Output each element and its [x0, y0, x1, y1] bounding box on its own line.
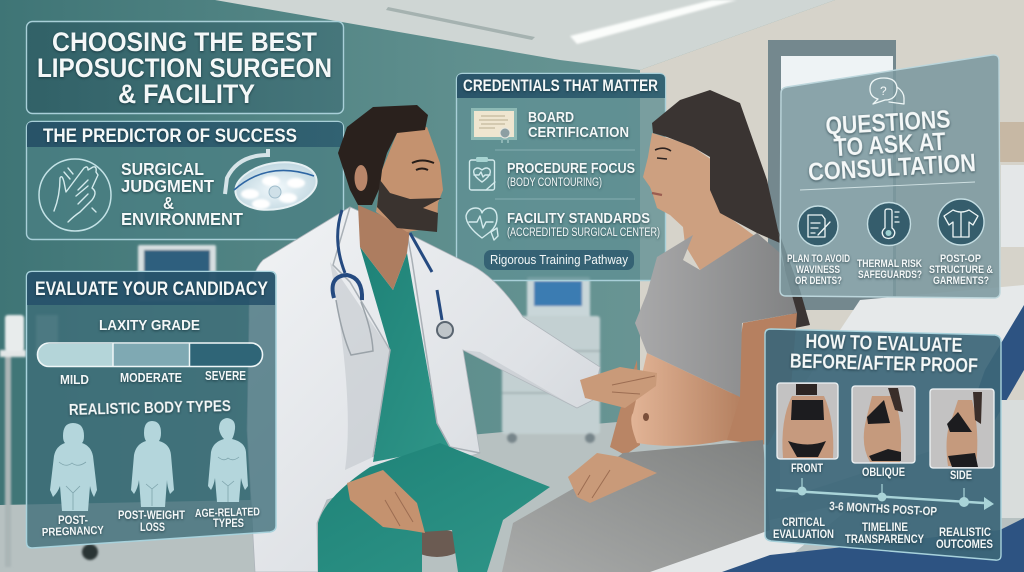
proof criteria labels: TRANSPARENCY — [845, 534, 924, 546]
question labels — [787, 253, 993, 287]
proof heading: HOW TO EVALUATE — [805, 331, 963, 357]
proof criteria labels: REALISTIC — [939, 527, 991, 539]
question labels: GARMENTS? — [933, 275, 989, 287]
board certification text: CERTIFICATION — [528, 124, 629, 141]
laxity grade scale bar — [37, 343, 262, 366]
patient: arm — [725, 313, 797, 445]
question labels: PLAN TO AVOID — [787, 253, 850, 265]
surgical judgment and environment text: SURGICAL — [121, 159, 204, 179]
doctor: stool — [318, 529, 464, 572]
doctor: eye and brow — [412, 160, 434, 170]
icon: heart with heartbeat — [466, 208, 498, 240]
questions heading — [805, 104, 977, 187]
photo: doctor — [247, 105, 600, 572]
timeline with arrow — [776, 478, 994, 510]
patient: trousers — [502, 440, 770, 572]
doctor: lapel lines — [333, 207, 480, 457]
body type labels: LOSS — [140, 522, 165, 534]
photo: side view — [930, 389, 994, 468]
title: LIPOSUCTION SURGEON — [37, 53, 332, 83]
doctor: trousers — [318, 443, 550, 572]
proof criteria labels: OUTCOMES — [936, 539, 993, 551]
doctor: stethoscope — [333, 210, 453, 355]
questions heading: QUESTIONS — [825, 105, 951, 141]
realistic body types heading: REALISTIC BODY TYPES — [69, 398, 231, 419]
icon: thermometer — [868, 202, 910, 246]
icon: surgical lamp — [225, 149, 320, 216]
body type labels: TYPES — [213, 518, 244, 530]
candidacy header band — [27, 272, 275, 305]
background: floor — [0, 420, 1024, 572]
body type labels — [42, 506, 260, 539]
photo: oblique view — [852, 386, 915, 463]
background: right wall — [640, 0, 1024, 420]
doctor: scrub top — [360, 247, 450, 462]
photo: patient — [502, 90, 810, 572]
procedure focus text: PROCEDURE FOCUS — [507, 160, 635, 177]
icon: question speech bubbles — [870, 78, 904, 104]
laxity scale labels: SEVERE — [205, 368, 246, 383]
body type labels: AGE-RELATED — [195, 506, 260, 520]
question labels: OR DENTS? — [795, 275, 842, 287]
question labels: SAFEGUARDS? — [858, 269, 922, 281]
panel: the predictor of success — [26, 122, 344, 240]
doctor: hair — [338, 105, 428, 205]
patient: navel — [643, 413, 649, 421]
doctor: face — [376, 127, 443, 232]
proof criteria labels: EVALUATION — [773, 529, 834, 541]
proof heading — [790, 331, 979, 377]
view labels: SIDE — [950, 468, 972, 482]
background: wall monitor — [138, 245, 216, 301]
questions heading: TO ASK AT — [833, 128, 946, 162]
doctor: hand on knee — [347, 470, 425, 533]
laxity scale labels: MILD — [60, 372, 89, 387]
background: window — [768, 40, 896, 310]
question labels: WAVINESS — [796, 264, 840, 276]
background: wall poster — [1001, 165, 1024, 247]
photo: front view — [777, 383, 838, 459]
rigorous training pathway pill — [484, 250, 634, 270]
patient: shirt — [635, 233, 797, 397]
timeline label: 3-6 MONTHS POST-OP — [829, 499, 937, 519]
icon: clipboard with heart — [470, 157, 495, 190]
background: ceiling light — [570, 0, 737, 44]
view labels — [791, 461, 972, 482]
laxity grade heading: LAXITY GRADE — [99, 317, 200, 334]
facility standards text — [507, 210, 660, 239]
body type labels: POST- — [58, 515, 88, 527]
icon: question speech bubbles: ? — [880, 84, 887, 98]
proof criteria labels: TIMELINE — [862, 522, 908, 534]
body type labels: PREGNANCY — [42, 525, 104, 539]
title — [37, 27, 332, 109]
board certification text — [528, 109, 629, 141]
rigorous training pathway pill: Rigorous Training Pathway — [490, 252, 628, 267]
background: wall stripe — [998, 122, 1024, 162]
background: exam table — [620, 285, 1024, 572]
doctor: beard — [377, 180, 442, 232]
doctor: sleeve shadow — [330, 262, 577, 470]
laxity scale labels: MODERATE — [120, 370, 182, 385]
credentials heading: CREDENTIALS THAT MATTER — [463, 76, 658, 95]
background: medical cart — [502, 277, 600, 443]
title: & FACILITY — [118, 79, 255, 109]
patient: hair — [652, 90, 780, 243]
procedure focus text: (BODY CONTOURING) — [507, 177, 602, 189]
proof heading: BEFORE/AFTER PROOF — [790, 351, 978, 377]
candidacy heading: EVALUATE YOUR CANDIDACY — [35, 279, 268, 300]
panel: questions to ask at consultation — [780, 55, 1000, 298]
body silhouette: post-weight loss — [131, 421, 174, 507]
credentials header band — [457, 74, 665, 98]
background: ceiling vent — [386, 7, 535, 40]
background: side shelf with bottles — [0, 315, 98, 567]
patient: back hair lower — [778, 230, 810, 328]
patient: hands — [568, 453, 657, 503]
proof criteria labels: CRITICAL — [782, 517, 825, 529]
doctor: ear — [354, 165, 368, 191]
view labels: OBLIQUE — [862, 465, 905, 479]
question labels: THERMAL RISK — [857, 258, 922, 270]
surgical judgment and environment text: JUDGMENT — [121, 176, 214, 196]
body silhouette: post-pregnancy — [50, 423, 97, 511]
panel: title — [26, 22, 344, 114]
doctor: neck — [358, 205, 410, 290]
patient: eye and brow — [655, 148, 671, 159]
patient: belly — [631, 353, 740, 446]
patient: near forearm — [610, 360, 640, 455]
body silhouette: age-related — [208, 418, 248, 502]
title: CHOOSING THE BEST — [52, 27, 317, 57]
board certification text: BOARD — [528, 109, 574, 126]
proof criteria labels — [773, 517, 993, 551]
patient: face and neck — [643, 133, 760, 270]
question labels: STRUCTURE & — [929, 264, 993, 276]
body type labels: POST-WEIGHT — [118, 510, 185, 522]
question labels: POST-OP — [940, 253, 981, 265]
facility standards text: (ACCREDITED SURGICAL CENTER) — [507, 227, 660, 239]
predictor header band — [27, 122, 343, 147]
surgical judgment and environment text: & — [163, 193, 174, 213]
icon: plan document — [798, 206, 838, 246]
panel: how to evaluate before/after proof — [765, 329, 1001, 560]
facility standards text: FACILITY STANDARDS — [507, 210, 650, 227]
doctor: coat — [247, 207, 600, 572]
background: ceiling — [215, 0, 835, 70]
icon: compression garment — [938, 199, 984, 245]
patient: lips — [652, 193, 662, 195]
questions heading: CONSULTATION — [807, 149, 977, 187]
surgical judgment and environment text — [121, 159, 243, 229]
procedure focus text — [507, 160, 635, 189]
icon: certificate — [471, 108, 517, 143]
icon: surgeon hand in circle — [39, 159, 111, 231]
panel: evaluate your candidacy — [26, 272, 276, 548]
surgical judgment and environment text: ENVIRONMENT — [121, 209, 243, 229]
doctor: hand on patient — [580, 367, 657, 408]
laxity scale labels — [60, 368, 246, 387]
panel: credentials that matter — [456, 74, 666, 280]
view labels: FRONT — [791, 461, 824, 475]
predictor heading: THE PREDICTOR OF SUCCESS — [43, 126, 297, 147]
